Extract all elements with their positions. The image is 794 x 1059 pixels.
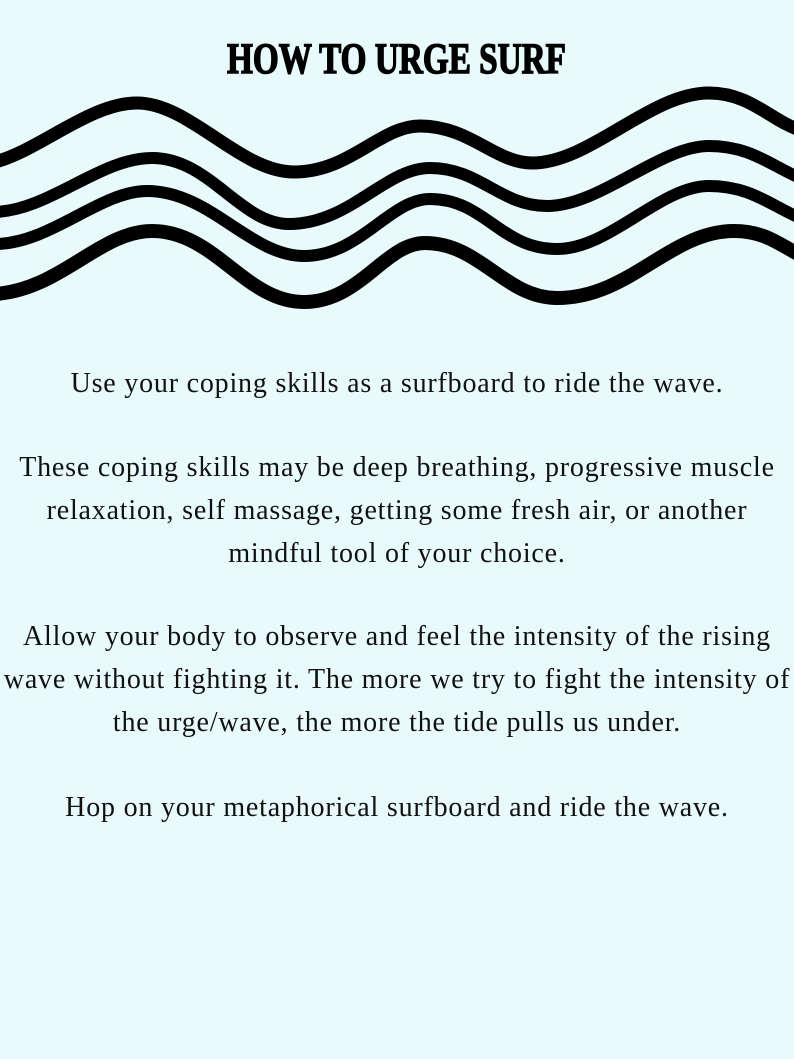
text block: paragraph 3 (4, 621, 790, 738)
text block: paragraph 2: mindful tool of your choice. (228, 538, 566, 569)
text block: paragraph 3: Allow your body to observe and feel the intensity of the rising (23, 621, 771, 652)
text block: paragraph 2 (19, 452, 775, 569)
text block: paragraph 1: Use your coping skills as a surfboard to ride the wave. (71, 368, 723, 399)
text block: paragraph 3: the urge/wave, the more the tide pulls us under. (113, 707, 681, 738)
text block: paragraph 4: Hop on your metaphorical surfboard and ride the wave. (65, 792, 729, 823)
text block: paragraph 3: wave without fighting it. The more we try to fight the intensity of (4, 664, 790, 695)
title: HOW TO URGE SURF (227, 36, 566, 83)
text block: paragraph 2: These coping skills may be deep breathing, progressive muscle (19, 452, 775, 483)
wave illustration (0, 86, 794, 309)
text block: paragraph 2: relaxation, self massage, getting some fresh air, or another (47, 495, 747, 526)
